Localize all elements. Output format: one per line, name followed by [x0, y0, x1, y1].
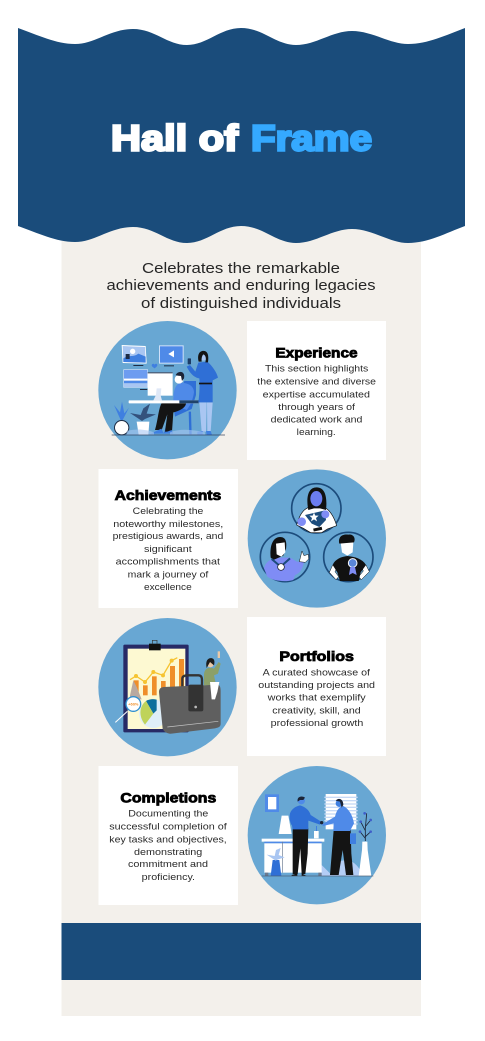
illustration: team at computer	[98, 321, 237, 459]
ground line	[262, 875, 373, 877]
text: achievements description	[113, 505, 223, 592]
plants and vases	[114, 402, 205, 435]
heading: portfolios: Portfolios	[279, 649, 354, 664]
text: portfolios description: works that exemplify	[267, 691, 366, 702]
text: experience description	[257, 363, 376, 437]
chair	[164, 381, 196, 434]
text: completions description	[109, 808, 227, 882]
panel: achievements	[98, 469, 386, 608]
text: completions description: successful completion of	[109, 821, 227, 832]
text: portfolios description: creativity, skill, and	[272, 704, 361, 715]
text: achievements description: mark a journey of	[128, 568, 209, 579]
ground line	[112, 434, 225, 436]
text: achievements description: prestigious awards, and	[113, 530, 223, 541]
illustration: clipboard and briefcase	[98, 618, 237, 756]
card: completions	[98, 766, 238, 905]
floating image frames	[122, 345, 184, 390]
circle background	[248, 469, 386, 608]
text: experience description: learning.	[297, 426, 336, 437]
card: portfolios	[247, 617, 386, 756]
heading: experience: Experience	[275, 346, 358, 361]
panel: completions	[98, 766, 386, 905]
title: Hall of	[111, 117, 239, 158]
text: completions description: key tasks and objectives,	[109, 833, 227, 844]
circle background	[98, 321, 237, 459]
pie chart	[139, 699, 168, 728]
man right	[320, 799, 356, 875]
text: achievements description: noteworthy milestones,	[113, 518, 223, 529]
text: completions description: Documenting the	[128, 808, 208, 819]
award winner: right	[324, 532, 373, 582]
text: achievements description: Celebrating the	[133, 505, 203, 516]
subtitle: achievements and enduring legacies	[106, 278, 376, 294]
illustration: handshake in office	[248, 766, 386, 904]
text: achievements description: significant	[144, 543, 192, 554]
text: experience description: This section highlights	[265, 363, 369, 374]
text: experience description: through years of	[278, 401, 355, 412]
text: achievements description: accomplishments that	[116, 555, 220, 566]
illustration: award winners	[248, 469, 386, 608]
text: experience description: the extensive and diverse	[257, 375, 376, 386]
seated woman	[204, 651, 221, 699]
circle background	[98, 618, 237, 756]
subtitle: of distinguished individuals	[141, 296, 341, 312]
card: achievements	[98, 469, 238, 608]
heading: completions: Completions	[120, 791, 217, 806]
man left	[290, 797, 322, 876]
text: completions description: demonstrating	[134, 846, 202, 857]
title	[111, 117, 372, 158]
text: experience description: dedicated work and	[271, 413, 362, 424]
award winner: top	[292, 484, 341, 533]
panel: experience	[98, 321, 386, 460]
desk and lamp	[262, 816, 324, 876]
footer band	[62, 923, 421, 980]
subtitle	[106, 261, 376, 312]
text: portfolios description: A curated showcase of	[263, 666, 370, 677]
text: completions description: proficiency.	[142, 871, 195, 882]
vase with branches	[359, 812, 372, 876]
subtitle: Celebrates the remarkable	[142, 261, 340, 277]
title: Frame	[251, 117, 372, 158]
text: experience description: expertise accumulated	[263, 388, 370, 399]
text: portfolios description: professional growth	[271, 717, 363, 728]
award winner: left	[260, 532, 310, 582]
clipboard with chart	[123, 640, 189, 732]
background hills	[320, 860, 363, 876]
magnifier: +60%	[128, 702, 139, 707]
circle background	[248, 766, 386, 904]
card: experience	[247, 321, 386, 460]
potted plant	[267, 848, 285, 876]
wavy header banner	[18, 28, 465, 243]
text: portfolios description: outstanding projects and	[258, 679, 375, 690]
standing woman	[187, 351, 218, 435]
panel: portfolios	[98, 617, 386, 756]
desk and monitor	[129, 372, 199, 403]
text: achievements description: excellence	[144, 581, 192, 592]
heading: achievements: Achievements	[115, 488, 222, 503]
window blinds	[324, 794, 358, 829]
text: portfolios description	[258, 666, 375, 728]
text: completions description: commitment and	[128, 858, 208, 869]
seated man	[151, 372, 194, 434]
wall frame	[265, 794, 279, 812]
briefcase	[159, 675, 221, 734]
background panel	[62, 200, 421, 1016]
